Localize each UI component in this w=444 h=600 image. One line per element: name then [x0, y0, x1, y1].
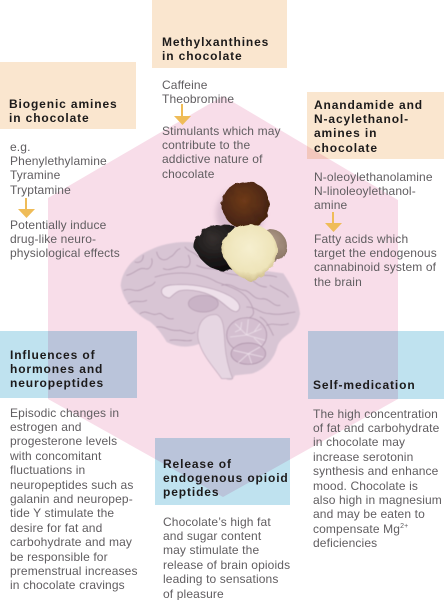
text: self-medication body	[313, 406, 442, 550]
panel: biogenic amines header	[0, 62, 136, 129]
heading: influences: Influences of	[10, 348, 95, 362]
brain illustration	[120, 242, 300, 380]
text: influences body: progesterone levels	[10, 434, 117, 448]
chocolate balls	[193, 182, 288, 282]
text: fatty acids	[314, 232, 437, 289]
text: fatty acids: cannabinoid system of	[314, 260, 436, 274]
text: release body: release of brain opioids	[163, 558, 290, 572]
thalamus	[188, 295, 218, 312]
cerebellum	[227, 318, 267, 364]
text: biogenic examples: Tyramine	[10, 168, 60, 182]
panel: self-medication header	[308, 331, 444, 399]
text: anandamide list: amine	[314, 198, 347, 212]
text: influences body: premenstrual increases	[10, 564, 138, 578]
text: self-medication body: mood. Chocolate is	[313, 479, 418, 493]
text: biogenic effects	[10, 218, 120, 260]
heading: anandamide: N-acylethanol-	[314, 112, 409, 126]
panel: release header	[155, 438, 290, 505]
text: fatty acids: target the endogenous	[314, 246, 437, 260]
text: biogenic examples: Phenylethylamine	[10, 154, 107, 168]
heading: anandamide: Anandamide and	[314, 98, 423, 112]
taupe ball	[253, 229, 287, 263]
text: release body: leading to sensations	[163, 572, 278, 586]
text: self-medication body: increase serotonin	[313, 450, 413, 464]
text: release body: and sugar content	[163, 529, 261, 543]
text: caffeine list	[162, 78, 234, 106]
text: influences body: desire for fat and	[10, 521, 102, 535]
text: influences body: Episodic changes in	[10, 406, 119, 420]
text: biogenic effects: physiological effects	[10, 246, 120, 260]
ball shadow	[216, 188, 264, 240]
corpus callosum	[162, 285, 240, 312]
text: biogenic effects: Potentially induce	[10, 218, 106, 232]
text: self-medication body: synthesis and enhance	[313, 464, 438, 478]
heading: methylxanthines: in chocolate	[162, 49, 243, 63]
brown ball	[222, 181, 270, 229]
text: influences body: fluctuations in	[10, 463, 85, 477]
text: stimulants: Stimulants which may	[162, 124, 281, 138]
heading: biogenic amines	[9, 96, 118, 125]
text: release body	[163, 514, 290, 600]
text: self-medication body: also high in magnesium	[313, 493, 442, 507]
heading: release	[163, 456, 289, 499]
heading: release: endogenous opioid	[163, 471, 289, 485]
text: influences body: with concomitant	[10, 449, 101, 463]
heading: methylxanthines	[162, 34, 269, 63]
text: influences body: in chocolate cravings	[10, 578, 125, 592]
text: fatty acids: Fatty acids which	[314, 232, 408, 246]
text: stimulants	[162, 124, 281, 181]
panel: methylxanthines header	[152, 0, 287, 68]
text: stimulants: addictive nature of	[162, 152, 263, 166]
brainstem	[198, 315, 233, 379]
heading: anandamide	[314, 98, 423, 155]
text: influences body: carbohydrate and may	[10, 535, 132, 549]
text: release body: may stimulate the	[163, 543, 259, 557]
text: self-medication body: in chocolate may	[313, 435, 405, 449]
text: stimulants: chocolate	[162, 167, 215, 181]
text: self-medication body: The high concentration	[313, 406, 438, 420]
text: influences body: galanin and neuropep-	[10, 492, 133, 506]
panel: influences header	[0, 331, 137, 398]
text: biogenic examples: e.g.	[10, 140, 31, 154]
text: release body: Chocolate’s high fat	[163, 514, 271, 528]
heading: release: Release of	[163, 456, 232, 470]
heading: influences: hormones and	[10, 362, 103, 376]
text: influences body: be responsible for	[10, 550, 108, 564]
heading: influences	[10, 348, 104, 390]
arrow: biogenic	[18, 198, 35, 218]
text: self-medication body: compensate Mg2+	[313, 522, 408, 536]
text: anandamide list: N-linoleoylethanol-	[314, 184, 416, 198]
text: influences body: estrogen and	[10, 420, 82, 434]
text: influences body: tide Y stimulate the	[10, 506, 114, 520]
text: fatty acids: the brain	[314, 275, 362, 289]
text: biogenic effects: drug-like neuro-	[10, 232, 96, 246]
panel: anandamide header	[307, 92, 444, 159]
arrow: anandamide	[325, 212, 342, 232]
heading: biogenic amines: in chocolate	[9, 111, 90, 125]
text: influences body: neuropeptides such as	[10, 478, 133, 492]
heading: methylxanthines: Methylxanthines	[162, 34, 269, 48]
heading: release: peptides	[163, 485, 219, 499]
text: self-medication body: of fat and carbohydrate	[313, 421, 439, 435]
text: stimulants: contribute to the	[162, 138, 250, 152]
text: caffeine list: Theobromine	[162, 92, 234, 106]
text: biogenic examples: Tryptamine	[10, 183, 71, 197]
heading: anandamide: chocolate	[314, 141, 378, 155]
text: anandamide list	[314, 170, 433, 212]
dark ball	[194, 225, 242, 271]
text: influences body	[10, 406, 138, 592]
text: caffeine list: Caffeine	[162, 78, 208, 92]
text: self-medication body: deficiencies	[313, 536, 377, 550]
text: anandamide list: N-oleoylethanolamine	[314, 170, 433, 184]
text: self-medication body: and may be eaten to	[313, 507, 425, 521]
white ball	[221, 224, 278, 281]
heading: anandamide: amines in	[314, 126, 377, 140]
heading: biogenic amines: Biogenic amines	[9, 96, 118, 110]
arrow: methylxanthines	[174, 104, 191, 125]
text: biogenic examples	[10, 140, 107, 197]
heading: influences: neuropeptides	[10, 376, 104, 390]
heading: self-medication: Self-medication	[313, 378, 416, 392]
